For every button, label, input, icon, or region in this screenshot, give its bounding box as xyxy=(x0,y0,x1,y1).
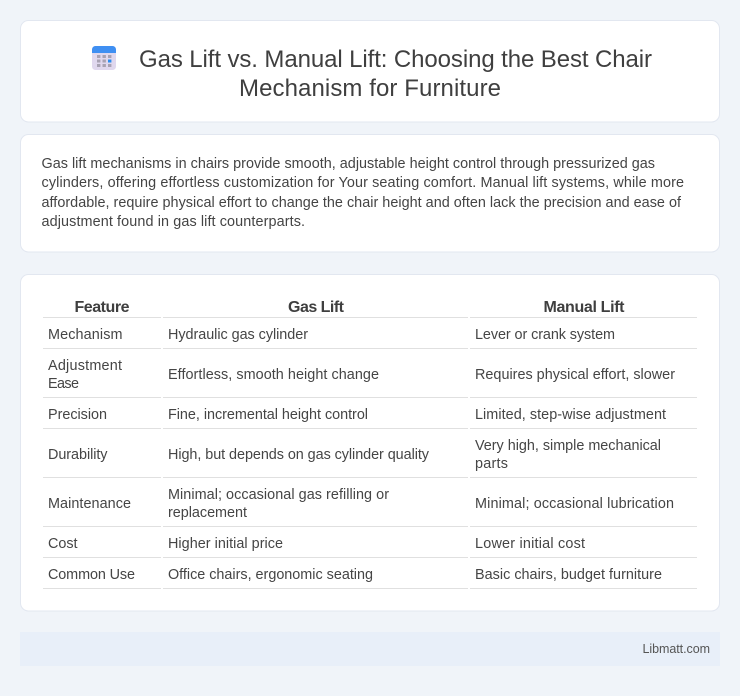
title: Gas Lift vs. Manual Lift: Choosing the Best Chair xyxy=(139,46,652,73)
row: precision: Fine, incremental height control xyxy=(168,407,368,423)
icon: calendar xyxy=(92,46,116,70)
text block: intro: cylinders, offering effortless customization for Your seating comfort. Manual lift systems, while more xyxy=(42,175,684,191)
row: durability: parts xyxy=(475,456,508,472)
row: cost xyxy=(48,536,585,552)
row: precision xyxy=(48,407,666,423)
text block: intro: Gas lift mechanisms in chairs provide smooth, adjustable height control through pressurized gas xyxy=(42,156,655,172)
row: common use: Office chairs, ergonomic seating xyxy=(168,567,373,583)
text block: intro: adjustment found in gas lift counterparts. xyxy=(42,214,305,230)
row: durability: Durability xyxy=(48,447,108,463)
panel: intro paragraph xyxy=(20,134,720,252)
title: Mechanism for Furniture xyxy=(239,75,501,102)
row: cost: Higher initial price xyxy=(168,536,283,552)
text block: intro: affordable, require physical effort to change the chair height and often lack the precision and ease of xyxy=(42,195,682,211)
row: adjustment ease: Adjustment xyxy=(48,358,122,374)
row: adjustment ease: Requires physical effort, slower xyxy=(475,367,675,383)
row: mechanism: Hydraulic gas cylinder xyxy=(168,327,308,343)
table header: Gas Lift xyxy=(288,299,345,316)
table header xyxy=(74,299,625,316)
footer credit: Libmatt.com xyxy=(642,642,710,656)
row: durability: High, but depends on gas cylinder quality xyxy=(168,447,430,463)
footer xyxy=(20,632,720,666)
row: maintenance: Maintenance xyxy=(48,496,131,512)
row: common use: Basic chairs, budget furniture xyxy=(475,567,662,583)
panel: title header xyxy=(20,20,720,122)
table header: Feature xyxy=(74,299,130,316)
row: mechanism: Mechanism xyxy=(48,327,122,343)
row: maintenance xyxy=(48,487,674,521)
table header: Manual Lift xyxy=(544,299,625,316)
row: adjustment ease: Effortless, smooth height change xyxy=(168,367,379,383)
row: durability: Very high, simple mechanical xyxy=(475,438,661,454)
row: precision: Limited, step-wise adjustment xyxy=(475,407,666,423)
row: precision: Precision xyxy=(48,407,107,423)
row: maintenance: Minimal; occasional gas refilling or xyxy=(168,487,389,503)
row: cost: Cost xyxy=(48,536,78,552)
row: adjustment ease: Ease xyxy=(48,376,79,392)
row: mechanism: Lever or crank system xyxy=(475,327,615,343)
row: cost: Lower initial cost xyxy=(475,536,585,552)
row: common use xyxy=(48,567,662,583)
text block: intro xyxy=(42,156,684,230)
title xyxy=(139,46,652,102)
row: durability xyxy=(48,438,661,472)
row: maintenance: replacement xyxy=(168,505,247,521)
row: adjustment ease xyxy=(48,358,675,392)
panel: comparison table xyxy=(20,274,720,611)
row: common use: Common Use xyxy=(48,567,135,583)
row: maintenance: Minimal; occasional lubrication xyxy=(475,496,674,512)
row: mechanism xyxy=(48,327,615,343)
